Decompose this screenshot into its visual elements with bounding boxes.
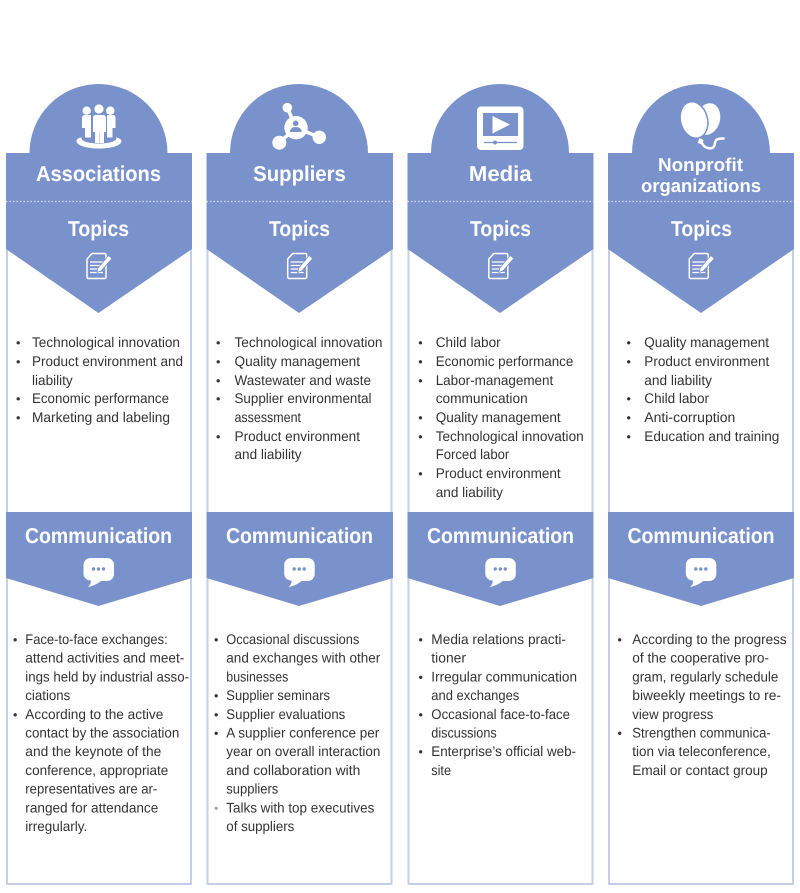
topics list: Child labor bbox=[436, 334, 501, 350]
topics list: Quality management bbox=[644, 334, 769, 350]
icon: group of people bbox=[76, 104, 122, 148]
icon: video player bbox=[477, 106, 524, 150]
communication banner bbox=[206, 512, 393, 606]
icon: document and pen bbox=[87, 254, 112, 278]
communication list: conference, appropriate bbox=[25, 762, 169, 778]
communication list: • bbox=[418, 745, 423, 759]
communication list: According to the active bbox=[25, 706, 164, 722]
topics list: Quality management bbox=[436, 409, 561, 425]
communication list: businesses bbox=[226, 668, 288, 684]
topics list: • bbox=[626, 336, 631, 350]
icon: document and pen bbox=[689, 254, 714, 278]
topics list: • bbox=[216, 355, 220, 369]
topics list: Product environment bbox=[234, 428, 360, 444]
heading: Topics: Topics bbox=[269, 217, 330, 241]
communication list: and exchanges bbox=[431, 687, 519, 703]
topics list: Supplier environmental bbox=[234, 390, 372, 406]
panel outline bbox=[208, 200, 392, 884]
communication list: • bbox=[418, 708, 423, 722]
topics list: liability bbox=[32, 372, 73, 388]
heading: Media: Media bbox=[469, 162, 533, 186]
communication list bbox=[214, 631, 381, 834]
topics list: Forced labor bbox=[436, 446, 510, 462]
topics list: Technological innovation bbox=[234, 334, 382, 350]
panel: nonprofit organizations bbox=[608, 84, 794, 884]
communication list: ings held by industrial asso- bbox=[25, 668, 189, 684]
topics list: • bbox=[418, 411, 423, 425]
communication list: • bbox=[618, 726, 622, 740]
topics list: and liability bbox=[436, 484, 503, 500]
communication list: contact by the association bbox=[25, 724, 179, 740]
topics list: • bbox=[216, 392, 220, 406]
topics list: • bbox=[216, 374, 220, 388]
communication list: • bbox=[13, 633, 17, 647]
communication list: Occasional face-to-face bbox=[431, 706, 570, 722]
topics list: and liability bbox=[644, 372, 712, 388]
topics list: • bbox=[626, 430, 631, 444]
communication list: Strengthen communica- bbox=[632, 724, 771, 740]
header banner with dome bbox=[608, 84, 794, 313]
communication list: Face-to-face exchanges: bbox=[25, 631, 168, 647]
topics list: and liability bbox=[234, 446, 302, 462]
communication list: Supplier evaluations bbox=[226, 706, 345, 722]
topics list: Product environment bbox=[436, 465, 561, 481]
topics list: communication bbox=[436, 390, 528, 406]
topics list: Education and training bbox=[644, 428, 779, 444]
communication list: Irregular communication bbox=[431, 668, 577, 684]
icon: speech bubble bbox=[686, 558, 716, 587]
communication list: and collaboration with bbox=[226, 762, 360, 778]
icon: speech bubble bbox=[485, 558, 516, 587]
communication list: tion via teleconference, bbox=[632, 743, 771, 759]
communication list: • bbox=[214, 689, 218, 703]
topics list: assessment bbox=[234, 409, 301, 425]
communication banner bbox=[608, 512, 794, 606]
icon: speech bubble bbox=[84, 558, 114, 587]
heading: Topics: Topics bbox=[470, 217, 531, 241]
heading: Nonprofit organizations: Nonprofit bbox=[658, 154, 743, 175]
icon: document and pen bbox=[489, 254, 514, 278]
communication list: • bbox=[418, 633, 423, 647]
heading: Communication: Communication bbox=[427, 524, 574, 548]
communication list: Occasional discussions bbox=[226, 631, 359, 647]
heading: Nonprofit organizations: organizations bbox=[641, 175, 761, 196]
topics list: Labor-management bbox=[436, 372, 553, 388]
communication list: attend activities and meet- bbox=[25, 650, 185, 666]
communication list: biweekly meetings to re- bbox=[632, 687, 781, 703]
topics list bbox=[418, 334, 584, 500]
communication list: • bbox=[214, 801, 218, 815]
communication list bbox=[418, 631, 577, 778]
communication list: • bbox=[13, 708, 17, 722]
topics list: Technological innovation bbox=[32, 334, 180, 350]
topics list bbox=[216, 334, 382, 462]
topics list: • bbox=[16, 355, 20, 369]
communication list: Talks with top executives bbox=[226, 799, 374, 815]
topics list: • bbox=[216, 336, 220, 350]
icon: speech bubble bbox=[284, 558, 315, 587]
topics list bbox=[16, 334, 183, 425]
panel outline bbox=[7, 200, 191, 884]
icon: connected network bbox=[272, 103, 326, 150]
header banner with dome bbox=[408, 84, 594, 313]
communication list: discussions bbox=[431, 724, 497, 740]
icon: balloons bbox=[676, 99, 724, 148]
communication list: and the keynote of the bbox=[25, 743, 161, 759]
communication list bbox=[618, 631, 787, 778]
panel outline bbox=[609, 200, 793, 884]
communication list: Email or contact group bbox=[632, 762, 768, 778]
heading: Nonprofit organizations bbox=[641, 154, 761, 196]
communication list: representatives are ar- bbox=[25, 781, 158, 797]
communication list: • bbox=[214, 726, 218, 740]
heading: Communication: Communication bbox=[25, 524, 172, 548]
topics list: • bbox=[16, 336, 20, 350]
heading: Suppliers: Suppliers bbox=[253, 162, 346, 186]
communication list: site bbox=[431, 762, 451, 778]
communication list: gram, regularly schedule bbox=[632, 668, 779, 684]
communication list: year on overall interaction bbox=[226, 743, 380, 759]
topics list: • bbox=[418, 430, 423, 444]
topics list: Child labor bbox=[644, 390, 709, 406]
topics list: • bbox=[418, 467, 423, 481]
topics list: Anti-corruption bbox=[644, 409, 735, 425]
panel: associations bbox=[6, 84, 192, 884]
heading: Communication: Communication bbox=[226, 524, 373, 548]
topics list: • bbox=[16, 392, 20, 406]
communication list: suppliers bbox=[226, 781, 278, 797]
panel: media bbox=[408, 84, 594, 884]
communication list: of suppliers bbox=[226, 818, 294, 834]
communication list: Enterprise’s official web- bbox=[431, 743, 576, 759]
heading: Associations: Associations bbox=[36, 162, 161, 186]
heading: Communication: Communication bbox=[628, 524, 774, 548]
heading: Topics: Topics bbox=[671, 217, 732, 241]
communication list: • bbox=[418, 670, 423, 684]
topics list: • bbox=[418, 336, 423, 350]
communication list: • bbox=[618, 633, 622, 647]
topics list: Quality management bbox=[234, 353, 360, 369]
communication list: • bbox=[214, 633, 218, 647]
communication list: view progress bbox=[632, 706, 713, 722]
header banner with dome bbox=[6, 84, 192, 313]
topics list: • bbox=[626, 411, 631, 425]
topics list: • bbox=[418, 355, 423, 369]
communication banner bbox=[408, 512, 594, 606]
communication list: A supplier conference per bbox=[226, 724, 380, 740]
communication list: According to the progress bbox=[632, 631, 787, 647]
communication list bbox=[13, 631, 189, 834]
topics list: Economic performance bbox=[436, 353, 574, 369]
topics list: Economic performance bbox=[32, 390, 169, 406]
communication list: Media relations practi- bbox=[431, 631, 566, 647]
topics list bbox=[626, 334, 779, 444]
communication list: irregularly. bbox=[25, 818, 87, 834]
panel: suppliers bbox=[206, 84, 393, 884]
topics list: Wastewater and waste bbox=[234, 372, 371, 388]
icon: document and pen bbox=[288, 254, 313, 278]
communication list: Supplier seminars bbox=[226, 687, 330, 703]
panel outline bbox=[408, 200, 592, 884]
communication list: ranged for attendance bbox=[25, 799, 159, 815]
topics list: Product environment bbox=[644, 353, 769, 369]
communication list: and exchanges with other bbox=[226, 650, 381, 666]
topics list: • bbox=[626, 392, 631, 406]
communication list: of the cooperative pro- bbox=[632, 650, 769, 666]
heading: Topics: Topics bbox=[68, 217, 129, 241]
communication banner bbox=[6, 512, 192, 606]
topics list: Marketing and labeling bbox=[32, 409, 170, 425]
topics list: • bbox=[216, 430, 220, 444]
communication list: tioner bbox=[431, 650, 466, 666]
communication list: • bbox=[214, 708, 218, 722]
communication list: ciations bbox=[25, 687, 70, 703]
topics list: • bbox=[626, 355, 631, 369]
topics list: • bbox=[16, 411, 20, 425]
topics list: Product environment and bbox=[32, 353, 183, 369]
topics list: • bbox=[418, 374, 423, 388]
topics list: Technological innovation bbox=[436, 428, 584, 444]
header banner with dome bbox=[206, 84, 393, 313]
